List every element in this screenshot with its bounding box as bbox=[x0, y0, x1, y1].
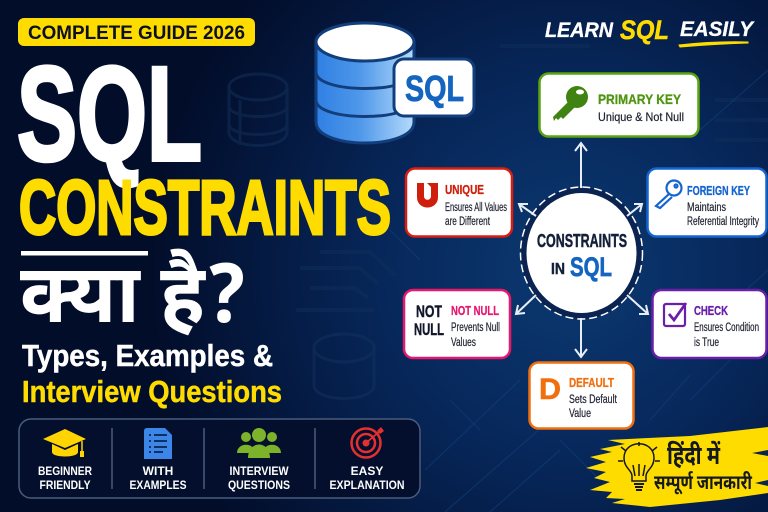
badge: SQL bbox=[394, 59, 474, 116]
subtitle: interview questions: Interview Questions bbox=[22, 374, 282, 409]
background decoration: faint database lower bbox=[314, 334, 374, 398]
title: SQL: SQL bbox=[17, 40, 202, 189]
banner: hindi: हिंदी में bbox=[667, 440, 721, 475]
background decoration: circuit lines bbox=[296, 46, 768, 310]
background decoration: faint database left bbox=[229, 74, 287, 146]
icon: checkbox bbox=[664, 303, 686, 326]
banner: hindi bbox=[586, 427, 768, 507]
icon: document bbox=[144, 428, 172, 459]
card: unique: are Different bbox=[445, 216, 491, 228]
title: CONSTRAINTS: CONSTRAINTS bbox=[19, 165, 391, 251]
background decoration: diagonal lines bbox=[390, 60, 768, 512]
card: not null: Prevents Null bbox=[451, 322, 500, 334]
icon: light bulb bbox=[618, 442, 660, 490]
center node: constraints in sql: SQL bbox=[570, 252, 612, 282]
card: default bbox=[530, 362, 634, 428]
badge: SQL: SQL bbox=[405, 68, 464, 109]
label: with examples: WITH bbox=[143, 464, 173, 478]
label: interview questions: QUESTIONS bbox=[228, 478, 290, 492]
tagline: learn sql easily: EASILY bbox=[680, 18, 755, 41]
tagline: learn sql easily: LEARN bbox=[545, 19, 614, 42]
tagline: learn sql easily bbox=[545, 15, 755, 47]
card: check bbox=[652, 290, 766, 358]
badge: complete guide 2026 bbox=[18, 18, 255, 46]
icon: outlined key bbox=[656, 180, 682, 208]
card: not null: Values bbox=[451, 337, 476, 349]
card: foreign key: Maintains bbox=[687, 202, 726, 214]
center node: constraints in sql bbox=[520, 187, 642, 319]
icon: database bbox=[316, 23, 414, 143]
label: beginner friendly: BEGINNER bbox=[38, 464, 92, 478]
card: check: CHECK bbox=[694, 303, 728, 318]
label: beginner friendly: FRIENDLY bbox=[40, 478, 90, 492]
label: interview questions: INTERVIEW bbox=[230, 464, 289, 478]
icon: graduation cap bbox=[43, 429, 86, 457]
card: default: Sets Default bbox=[569, 394, 618, 406]
title: hindi question: क्या है? bbox=[20, 248, 248, 356]
subtitle: types examples: Types, Examples & bbox=[22, 338, 273, 373]
card: foreign key bbox=[648, 168, 766, 236]
card: unique bbox=[406, 168, 512, 236]
card: not null bbox=[404, 290, 510, 358]
card: not null: NOT bbox=[416, 302, 442, 321]
card: default: DEFAULT bbox=[569, 375, 614, 390]
label: with examples: EXAMPLES bbox=[130, 478, 186, 492]
icon: target bbox=[352, 427, 384, 458]
card: primary key: PRIMARY KEY bbox=[598, 91, 682, 107]
card: primary key bbox=[540, 74, 698, 136]
label: easy explanation: EXPLANATION bbox=[330, 478, 404, 492]
card: primary key: Unique & Not Null bbox=[598, 110, 684, 124]
card: default: Value bbox=[569, 408, 591, 420]
badge: complete guide 2026: COMPLETE GUIDE 2026 bbox=[28, 23, 245, 44]
center node: constraints in sql: IN bbox=[551, 261, 565, 278]
tagline: learn sql easily: SQL bbox=[620, 15, 669, 45]
card: not null: NOT NULL bbox=[451, 303, 499, 318]
card: unique: Ensures All Values bbox=[445, 202, 507, 214]
card: check: is True bbox=[694, 337, 719, 349]
card: not null: NULL bbox=[414, 320, 444, 339]
label: easy explanation: EASY bbox=[351, 464, 383, 478]
center node: constraints in sql: CONSTRAINTS bbox=[537, 231, 627, 251]
icon: key bbox=[553, 86, 588, 121]
card: unique: UNIQUE bbox=[445, 182, 484, 197]
panel: features bbox=[19, 419, 420, 498]
arrows bbox=[516, 143, 648, 357]
icon: people bbox=[237, 428, 281, 458]
icon: U bbox=[417, 183, 438, 208]
card: default: D bbox=[539, 373, 561, 406]
